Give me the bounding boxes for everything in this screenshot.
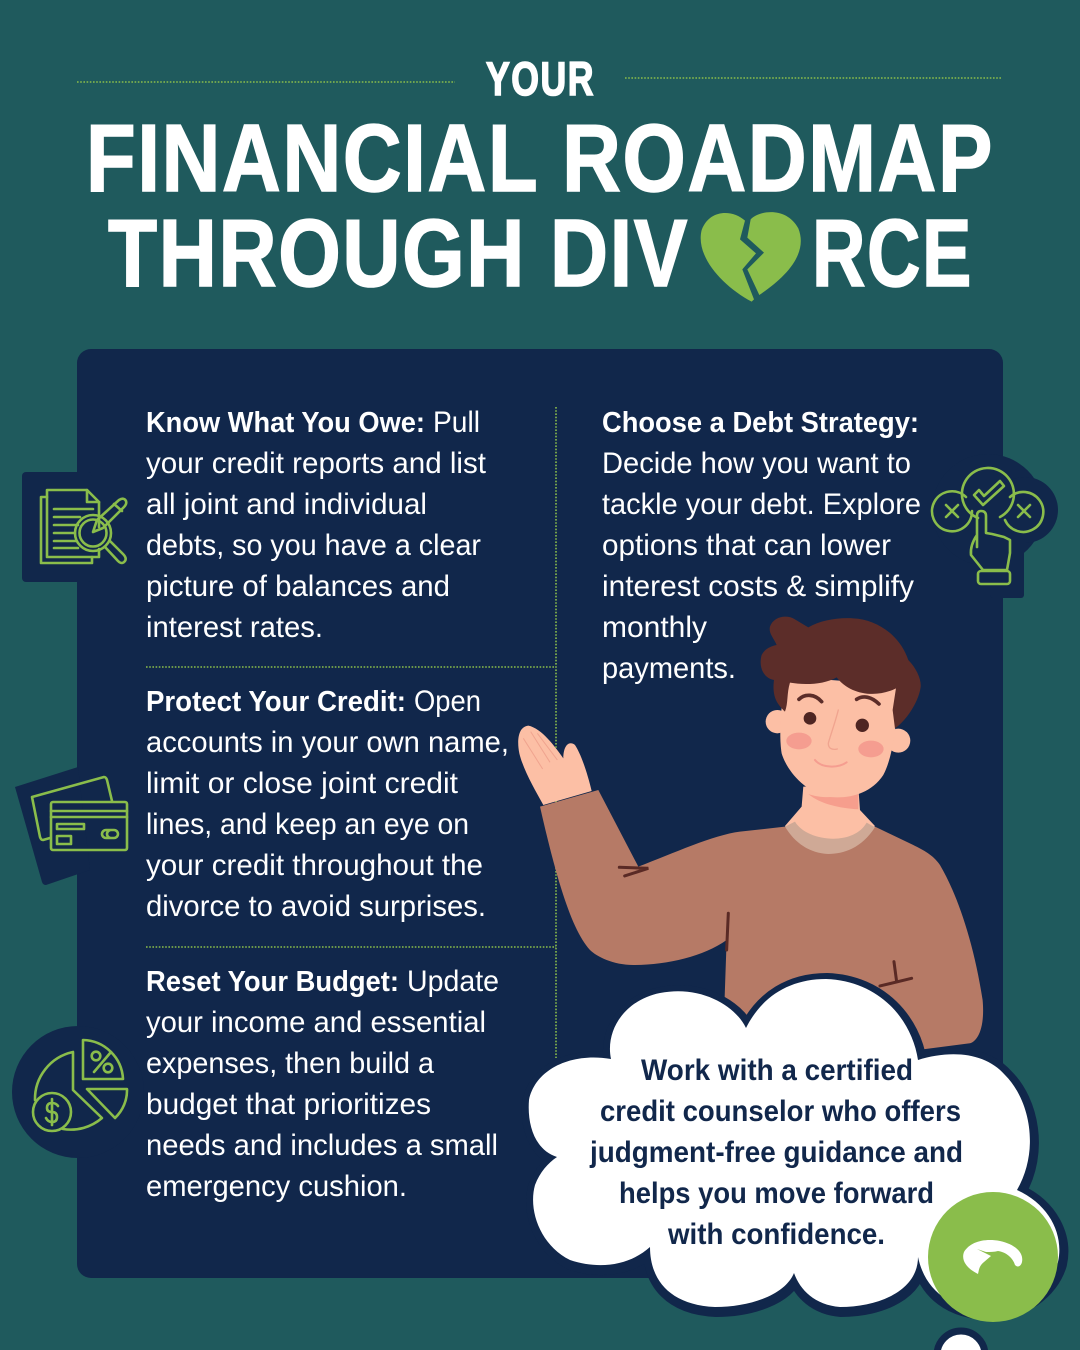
palm lines: [523, 732, 557, 769]
text block: choose a debt strategy: options that can lower: [602, 529, 891, 562]
text block: know what you owe: [146, 406, 486, 644]
text block: choose a debt strategy: Decide how you want to: [602, 447, 911, 480]
cloud fill: [529, 979, 1059, 1310]
sweater: [540, 790, 983, 1057]
text block: know what you owe: all joint and individual: [146, 488, 427, 521]
eyebrows: [799, 695, 879, 704]
callout text: helps you move forward: [619, 1177, 934, 1210]
text block: reset your budget: expenses, then build a: [146, 1047, 435, 1080]
column dividers: [146, 407, 556, 1058]
icon backing: decision: [932, 454, 1058, 598]
callout text: judgment-free guidance and: [589, 1136, 963, 1169]
title: [77, 52, 1002, 307]
green logo badge: [928, 1192, 1058, 1322]
text block: reset your budget: [146, 965, 499, 1203]
text block: reset your budget: Update: [407, 965, 499, 998]
text block: know what you owe: picture of balances and: [146, 570, 450, 603]
text block: protect your credit: divorce to avoid surprises.: [146, 890, 486, 923]
text block: know what you owe: debts, so you have a clear: [146, 529, 481, 562]
title: THROUGH DIV: [108, 200, 689, 307]
icon: broken heart: [701, 212, 801, 302]
icon: decision hand with check and crosses: [932, 468, 1043, 584]
title: RCE: [812, 200, 973, 307]
text block: reset your budget: Reset Your Budget:: [146, 966, 399, 998]
icon: budget pie chart: [33, 1040, 127, 1131]
text block: reset your budget: needs and includes a small: [146, 1129, 498, 1162]
collar: [785, 822, 875, 854]
face: [780, 677, 897, 797]
text block: protect your credit: Open: [414, 685, 481, 718]
text block: choose a debt strategy: interest costs & simplify: [602, 570, 914, 603]
small thought bubble: [937, 1331, 985, 1350]
title: YOUR: [486, 52, 595, 105]
callout text: with confidence.: [667, 1218, 885, 1251]
text block: protect your credit: [146, 685, 509, 923]
callout: thought cloud: [529, 979, 1060, 1312]
icon backing: document: [22, 472, 92, 582]
text block: protect your credit: limit or close joint credit: [146, 767, 458, 800]
neck: [785, 787, 875, 842]
icon: document with magnifier and pencil: [41, 490, 126, 563]
neck shadow: [808, 790, 858, 809]
panel: main navy: [77, 349, 1003, 1278]
cloud outline: [530, 981, 1060, 1312]
text block: know what you owe: Pull: [433, 406, 480, 439]
text block: reset your budget: emergency cushion.: [146, 1170, 407, 1203]
text block: choose a debt strategy: payments.: [602, 652, 736, 685]
text block: protect your credit: lines, and keep an eye on: [146, 808, 469, 841]
text block: know what you owe: interest rates.: [146, 611, 323, 644]
text block: choose a debt strategy: tackle your debt. Explore: [602, 488, 921, 521]
hand: [518, 726, 592, 805]
icon backing: cards: [15, 767, 90, 885]
ears: [766, 710, 789, 733]
text block: choose a debt strategy: monthly: [602, 611, 707, 644]
callout text: credit counselor who offers: [600, 1095, 961, 1128]
text block: reset your budget: your income and essential: [146, 1006, 486, 1039]
callout text: [589, 1054, 963, 1251]
text block: reset your budget: budget that prioritizes: [146, 1088, 431, 1121]
text block: know what you owe: Know What You Owe:: [146, 407, 425, 439]
cheeks: [786, 733, 812, 749]
callout text: Work with a certified: [641, 1054, 913, 1087]
icon backing: budget: [12, 1026, 144, 1158]
text block: protect your credit: accounts in your own name,: [146, 726, 509, 759]
text block: choose a debt strategy: Choose a Debt Strategy:: [602, 407, 919, 439]
text block: protect your credit: Protect Your Credit:: [146, 686, 406, 718]
text block: know what you owe: your credit reports and list: [146, 447, 486, 480]
mouth: [815, 760, 847, 767]
text block: protect your credit: your credit throughout the: [146, 849, 483, 882]
sleeve folds: [619, 867, 912, 986]
icon: credit cards: [32, 777, 127, 850]
nose: [828, 710, 838, 749]
text block: choose a debt strategy: [602, 407, 921, 685]
eyes: [804, 712, 816, 725]
person illustration: [518, 617, 983, 1057]
hair: [761, 617, 921, 728]
